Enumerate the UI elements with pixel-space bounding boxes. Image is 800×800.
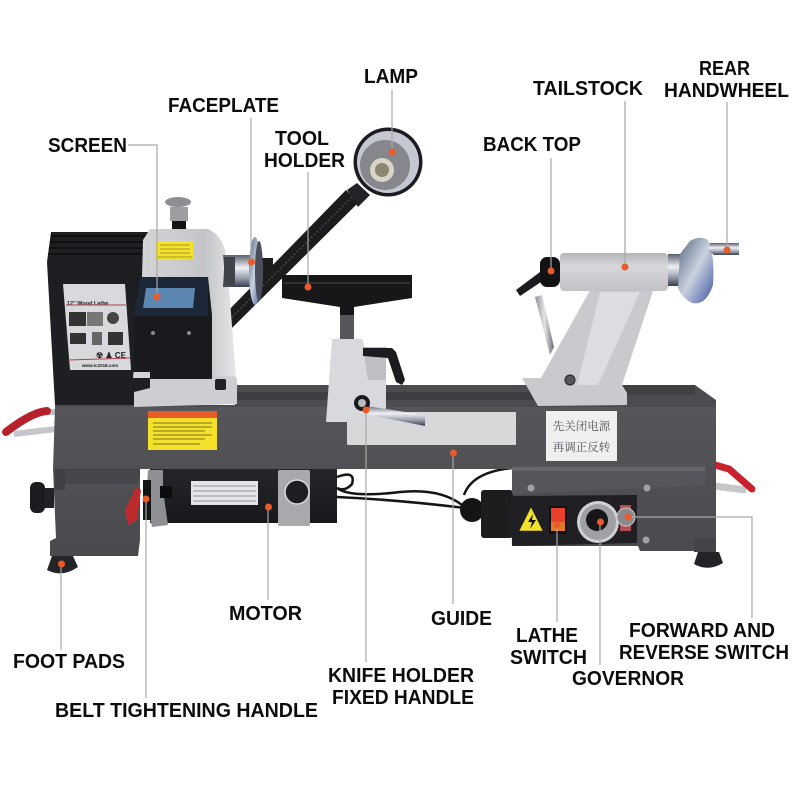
top adjuster knob xyxy=(165,197,191,229)
spec label xyxy=(63,284,131,370)
knife holder handle xyxy=(354,395,425,426)
motor housing xyxy=(47,232,150,405)
base plate xyxy=(134,376,237,407)
callout: screen xyxy=(48,135,160,300)
side knob xyxy=(30,482,54,513)
white notice label xyxy=(546,411,617,461)
black cables xyxy=(337,468,512,508)
white notice label: 先关闭电源 xyxy=(553,419,611,433)
callout: rear handwheel: HANDWHEEL xyxy=(664,80,789,102)
callout: rear handwheel xyxy=(664,58,789,254)
red handle left xyxy=(6,411,56,434)
callout: tailstock xyxy=(533,78,644,270)
control screen panel xyxy=(133,277,212,379)
callout: faceplate: FACEPLATE xyxy=(168,95,279,117)
callout: foot pads xyxy=(13,560,125,673)
spec label: ☢ ♟ CE xyxy=(96,351,127,360)
bed rails top xyxy=(55,385,716,410)
callout: knife holder fixed handle xyxy=(328,406,475,709)
foot pads xyxy=(47,552,723,573)
callout: foot pads: FOOT PADS xyxy=(13,651,125,673)
red handle right xyxy=(714,465,752,490)
belt tightening lever xyxy=(125,480,151,525)
warning label xyxy=(148,411,217,450)
callout: lathe switch: LATHE xyxy=(516,625,578,647)
clamp lever xyxy=(516,257,560,296)
grey casing xyxy=(133,229,236,378)
callout: faceplate xyxy=(168,95,279,266)
direction switch xyxy=(617,505,635,531)
chrome rod xyxy=(535,295,554,355)
callout: belt tightening handle xyxy=(55,496,318,722)
callout: knife holder fixed handle: FIXED HANDLE xyxy=(332,687,474,709)
headstock xyxy=(47,197,237,407)
grey guide plate xyxy=(347,412,516,445)
callout: guide xyxy=(431,450,492,630)
support legs xyxy=(522,285,655,406)
control panel xyxy=(460,463,705,546)
callout: rear handwheel: REAR xyxy=(699,58,750,80)
callout: knife holder fixed handle: KNIFE HOLDER xyxy=(328,665,475,687)
white notice label: 再调正反转 xyxy=(553,440,611,454)
callout: lathe switch: SWITCH xyxy=(510,647,587,669)
spec label: www.tc2018.com xyxy=(81,363,118,368)
callout: screen: SCREEN xyxy=(48,135,127,157)
callout: belt tightening handle: BELT TIGHTENING HANDLE xyxy=(55,700,318,722)
callout: tool holder: TOOL xyxy=(275,128,329,150)
callout: forward and reverse switch xyxy=(619,514,789,664)
callout: lathe switch xyxy=(510,522,587,669)
callout: governor: GOVERNOR xyxy=(572,668,685,690)
callout: tailstock: TAILSTOCK xyxy=(533,78,644,100)
motor xyxy=(146,469,337,527)
lamp xyxy=(224,128,422,328)
yellow caution label xyxy=(156,241,193,259)
callout: lamp: LAMP xyxy=(364,66,418,88)
callout: governor xyxy=(572,518,685,690)
callout: guide: GUIDE xyxy=(431,608,492,630)
callout: motor xyxy=(229,504,303,625)
tool rest base xyxy=(326,339,405,422)
callout: lamp xyxy=(364,66,418,156)
tool rest xyxy=(282,275,412,341)
governor knob xyxy=(577,501,619,543)
tailstock xyxy=(516,238,739,406)
callout: back top: BACK TOP xyxy=(483,134,581,156)
motor nameplate xyxy=(191,481,258,505)
callout: back top xyxy=(483,134,581,274)
callout: motor: MOTOR xyxy=(229,603,303,625)
bed front casting xyxy=(50,407,716,556)
lathe switch xyxy=(549,506,567,534)
ram cylinder xyxy=(560,253,668,291)
spindle and faceplate xyxy=(223,237,273,305)
spec label: 12" Wood Lathe xyxy=(67,301,109,307)
warning triangle xyxy=(519,507,543,531)
callout: forward and reverse switch: FORWARD AND xyxy=(629,620,775,642)
callout: tool holder xyxy=(264,128,346,290)
callout: forward and reverse switch: REVERSE SWITCH xyxy=(619,642,789,664)
hand wheel xyxy=(668,238,739,303)
callout: tool holder: HOLDER xyxy=(264,150,346,172)
